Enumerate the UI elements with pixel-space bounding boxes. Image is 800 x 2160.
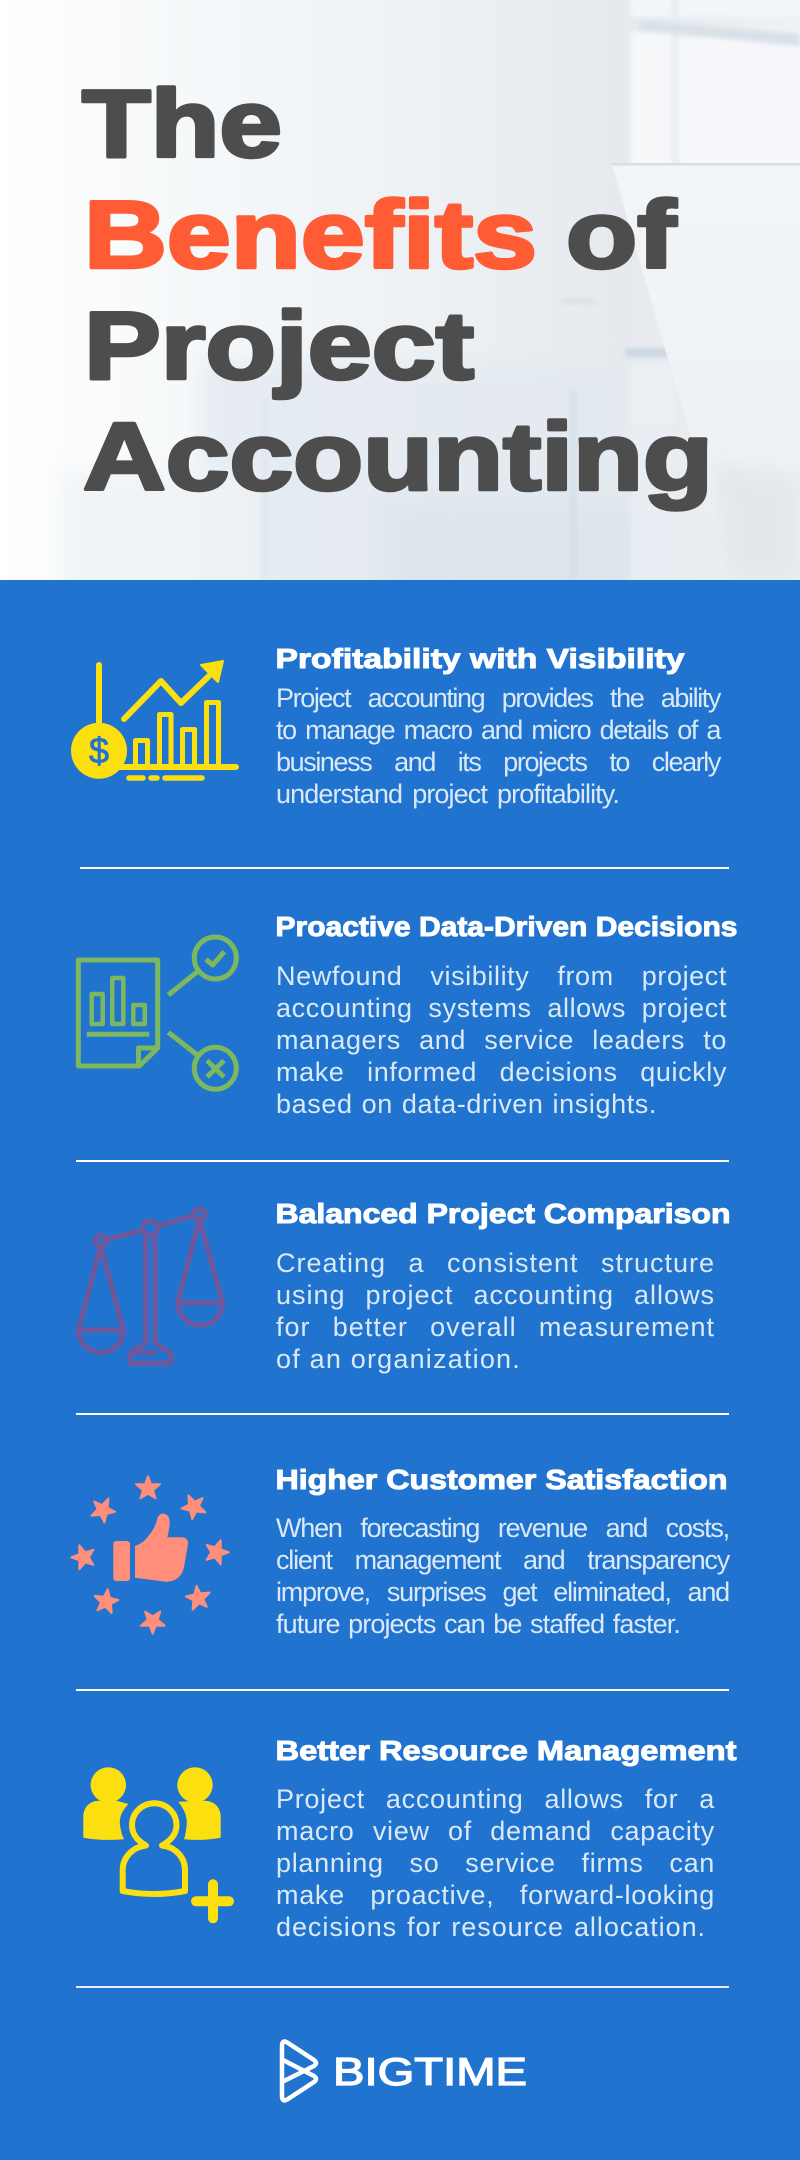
icon: balance scale: [78, 1208, 223, 1363]
text block: profitability: [276, 683, 722, 809]
icon: profit chart with dollar coin: [71, 661, 236, 779]
icon: thumbs up with ring of stars: [71, 1476, 229, 1634]
text block: project comparison: Creating a consistent structure: [276, 1248, 715, 1278]
text block: data-driven decisions: accounting systems allows project: [276, 993, 727, 1023]
divider 5: [76, 1986, 729, 1988]
icon: report with check and cross: [78, 937, 236, 1089]
logo: BigTime: [282, 2042, 527, 2100]
text block: customer satisfaction: improve, surprises get eliminated, and: [276, 1577, 729, 1607]
icon: profit chart with dollar coin: $: [89, 730, 109, 771]
divider 4: [76, 1689, 729, 1691]
logo: BigTime: BIGTIME: [333, 2051, 527, 2094]
text block: profitability: understand project profitability.: [276, 779, 619, 809]
text block: resource management: macro view of demand capacity: [276, 1816, 715, 1846]
heading: project comparison: Balanced Project Comparison: [276, 1198, 730, 1229]
text block: data-driven decisions: managers and service leaders to: [276, 1025, 727, 1055]
title: Project: [84, 292, 474, 400]
text block: resource management: planning so service firms can: [276, 1848, 715, 1878]
text block: project comparison: [276, 1248, 715, 1374]
heading: customer satisfaction: Higher Customer Satisfaction: [276, 1464, 728, 1495]
text block: customer satisfaction: client management and transparency: [276, 1545, 729, 1575]
text block: customer satisfaction: [276, 1513, 730, 1639]
divider 2: [76, 1160, 729, 1162]
text block: profitability: to manage macro and micro details of a: [276, 715, 720, 745]
title: [82, 70, 713, 510]
title: Benefits: [84, 182, 537, 288]
heading: profitability: Profitability with Visibility: [276, 643, 685, 674]
text block: data-driven decisions: make informed decisions quickly: [276, 1057, 727, 1087]
text block: profitability: Project accounting provides the ability: [276, 683, 720, 713]
heading: data-driven decisions: Proactive Data-Driven Decisions: [276, 911, 738, 942]
title: The: [82, 70, 282, 178]
text block: data-driven decisions: [276, 961, 727, 1119]
title: of: [566, 182, 677, 288]
divider 3: [76, 1413, 729, 1415]
text block: resource management: [276, 1784, 715, 1942]
text block: project comparison: using project accounting allows: [276, 1280, 715, 1310]
text block: data-driven decisions: based on data-driven insights.: [276, 1089, 657, 1119]
text block: resource management: Project accounting allows for a: [276, 1784, 715, 1814]
heading: resource management: Better Resource Management: [276, 1735, 736, 1766]
text block: resource management: make proactive, forward-looking: [276, 1880, 715, 1910]
divider 1: [80, 867, 729, 869]
text block: resource management: decisions for resource allocation.: [276, 1912, 706, 1942]
text block: customer satisfaction: When forecasting revenue and costs,: [276, 1513, 729, 1543]
title: Accounting: [83, 404, 713, 510]
text block: project comparison: of an organization.: [276, 1344, 521, 1374]
text block: customer satisfaction: future projects can be staffed faster.: [276, 1609, 680, 1639]
panel: blurred office photo header: [0, 0, 800, 600]
text block: profitability: business and its projects to clearly: [276, 747, 720, 777]
text block: project comparison: for better overall measurement: [276, 1312, 715, 1342]
text block: data-driven decisions: Newfound visibility from project: [276, 961, 727, 991]
icon: team with add person: [83, 1767, 229, 1918]
